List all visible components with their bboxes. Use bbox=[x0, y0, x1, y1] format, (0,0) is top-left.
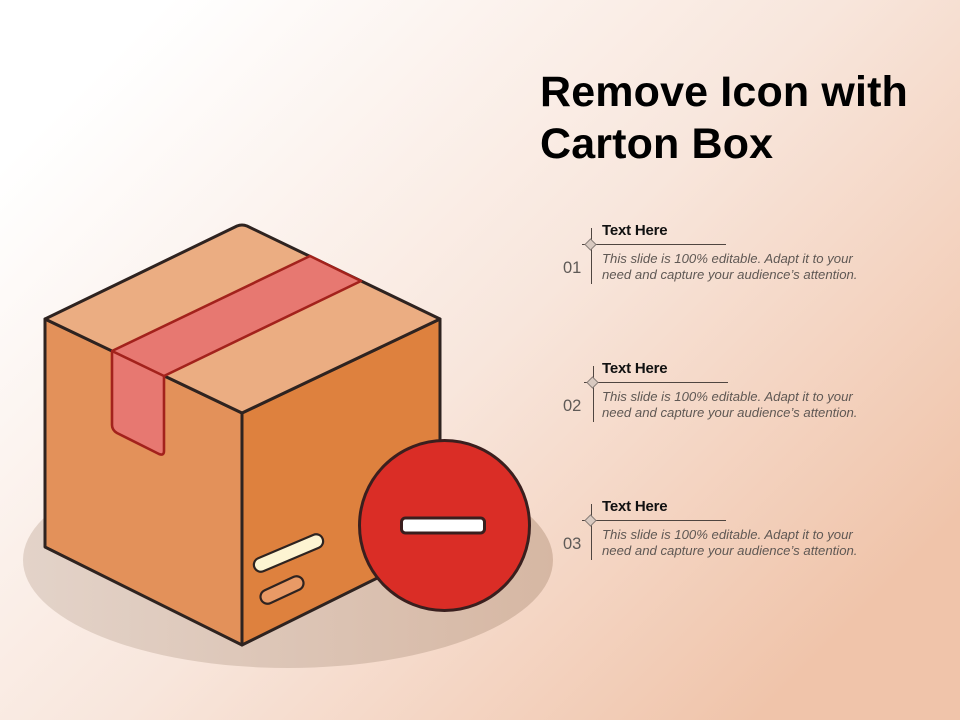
item 02 connector bbox=[584, 366, 728, 422]
tape bbox=[112, 256, 361, 455]
item 02: Text Here bbox=[602, 360, 667, 377]
item 03: need and capture your audience’s attention. bbox=[602, 543, 857, 558]
item 02: 02 bbox=[563, 397, 581, 415]
title bbox=[540, 68, 908, 168]
item 03: 03 bbox=[563, 535, 581, 553]
item 01: This slide is 100% editable. Adapt it to your bbox=[602, 251, 853, 266]
item 01 bbox=[563, 222, 857, 284]
item 01 connector bbox=[582, 228, 726, 284]
box label stripes bbox=[252, 532, 325, 606]
item 03 bbox=[563, 498, 857, 560]
title: Remove Icon with bbox=[540, 68, 908, 116]
remove icon bbox=[360, 440, 530, 610]
item 03: Text Here bbox=[602, 498, 667, 515]
item 02: need and capture your audience’s attention. bbox=[602, 405, 857, 420]
item 01: need and capture your audience’s attention. bbox=[602, 267, 857, 282]
box bbox=[45, 225, 440, 645]
item 02: This slide is 100% editable. Adapt it to your bbox=[602, 389, 853, 404]
item 02 bbox=[563, 360, 857, 422]
item 03 connector bbox=[582, 504, 726, 560]
item 03: This slide is 100% editable. Adapt it to your bbox=[602, 527, 853, 542]
shadow bbox=[23, 452, 553, 668]
item 01: Text Here bbox=[602, 222, 667, 239]
item 01: 01 bbox=[563, 259, 581, 277]
title: Carton Box bbox=[540, 120, 773, 168]
